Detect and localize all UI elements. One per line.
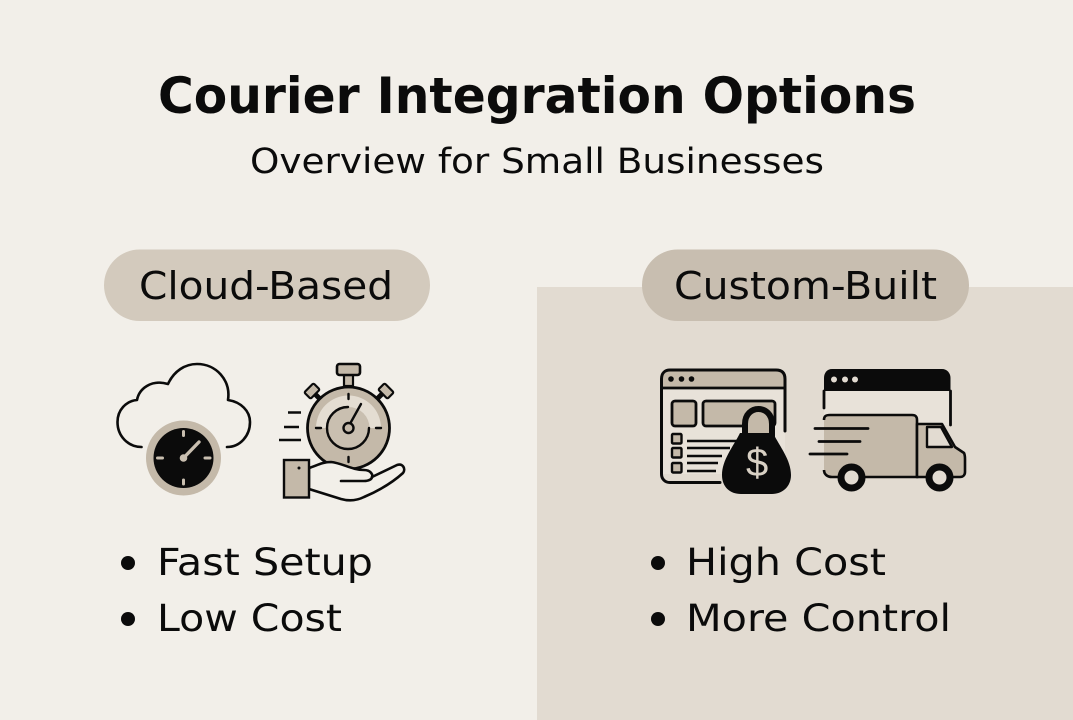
heading pill: Cloud-Based: Cloud-Based — [139, 264, 393, 308]
panel: cloud-based column — [104, 250, 430, 640]
heading pill: Custom-Built — [642, 250, 969, 321]
icon: web page with price lock: $ — [746, 441, 768, 485]
bullet list: custom-built — [651, 541, 951, 640]
heading pill: Cloud-Based — [104, 250, 430, 321]
icon: web page with price lock — [662, 370, 791, 494]
bullet list: custom-built: More Control — [686, 597, 951, 640]
bullet list: cloud-based: Low Cost — [157, 597, 342, 640]
panel: custom-built background — [537, 287, 1073, 720]
bullet list: custom-built: High Cost — [686, 541, 886, 584]
subtitle: Overview for Small Businesses — [250, 142, 824, 182]
panel: custom-built column — [642, 250, 969, 640]
icon: web page with delivery truck — [810, 369, 965, 488]
bullet list: cloud-based: Fast Setup — [157, 541, 373, 584]
title: Courier Integration Options — [158, 67, 916, 125]
bullet list: cloud-based — [121, 541, 373, 640]
heading pill: Custom-Built: Custom-Built — [674, 264, 937, 308]
icon: cloud with clock — [118, 364, 250, 496]
icon: stopwatch on hand — [279, 364, 404, 500]
